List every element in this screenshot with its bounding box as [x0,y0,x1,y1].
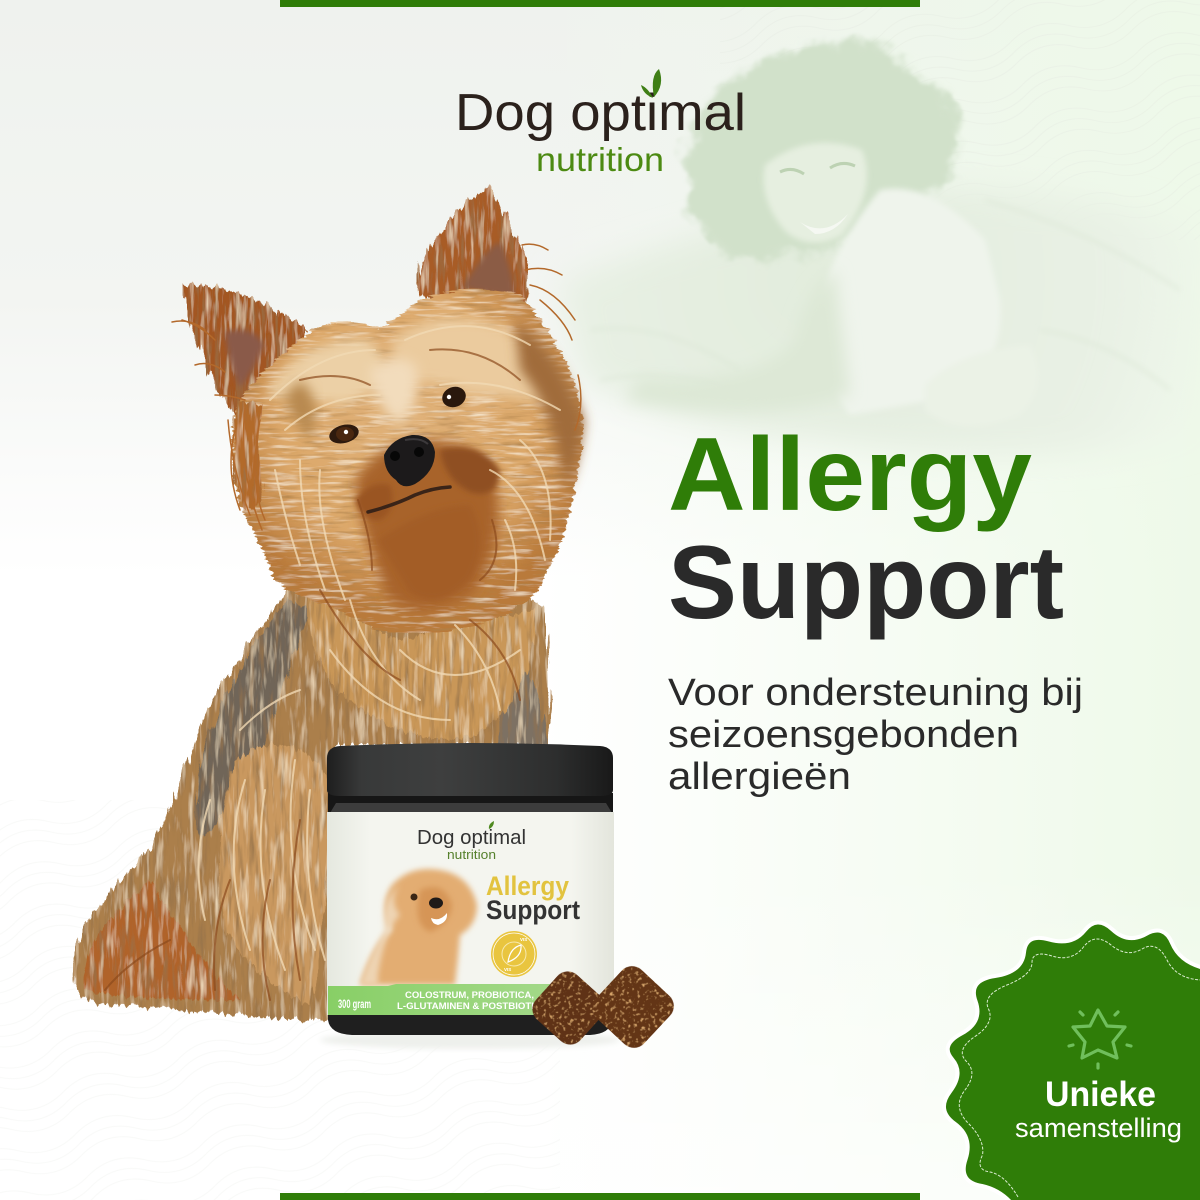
jar neck [328,793,613,814]
jar poodle illustration [360,869,477,985]
subtitle: seizoensgebonden [668,714,1019,756]
badge subtitle: samenstelling [1015,1113,1182,1143]
jar neck highlights [330,803,612,813]
ingredients line 1: COLOSTRUM, PROBIOTICA, [405,990,534,1001]
net weight: 300 gram [338,997,371,1011]
right ear [418,187,530,310]
headline [668,417,1064,641]
logo subline: nutrition [536,141,664,178]
logo leaves [641,69,661,98]
headline second line: Support [668,525,1064,641]
yorkshire terrier [71,187,584,1022]
jar shadow [320,1031,620,1049]
chest fur [308,580,535,739]
jar fish badge: VIS [520,937,527,942]
jar label logo [417,821,526,862]
ingredients line 2: L-GLUTAMINEN & POSTBIOTI [397,1001,534,1012]
dog eyes [327,383,469,446]
subtitle: allergieën [668,756,851,798]
bottom accent bar [280,1193,920,1200]
left ear [182,285,308,425]
jar green band [328,984,560,1015]
jar logo subline: nutrition [447,848,496,862]
dog nose [384,435,435,486]
logo [455,69,746,178]
jar bottom [328,1005,613,1035]
badge: unique composition [944,922,1200,1200]
logo wordmark: Dog optimal [455,84,746,142]
badge title: Unieke [1045,1075,1156,1114]
jar logo wordmark: Dog optimal [417,827,526,849]
chew 1 [527,966,611,1050]
headline first line: Allergy [668,417,1032,533]
top accent bar [280,0,920,7]
background photo: woman (ghosted green) [560,42,1200,455]
jar title first line: Allergy [486,871,569,901]
hair strands [105,244,581,1000]
jar lid [327,743,613,796]
jar fish badge: VIS [504,967,511,972]
icon: star [1069,1010,1131,1068]
jar logo leaf [489,821,494,829]
muzzle and beard [355,440,500,611]
chew 2 [586,960,680,1054]
badge scalloped shape [944,922,1200,1200]
dog body [71,560,549,1022]
product jar [320,743,680,1054]
subtitle: Voor ondersteuning bij [668,672,1083,714]
badge dashed inner line [959,939,1200,1197]
jar label [327,812,614,1015]
subtitle [668,672,1083,798]
head fur [232,289,584,635]
jar title second line: Support [486,895,580,925]
dog mouth [368,487,450,512]
jar fish badge [491,931,537,977]
jar title [486,871,580,925]
